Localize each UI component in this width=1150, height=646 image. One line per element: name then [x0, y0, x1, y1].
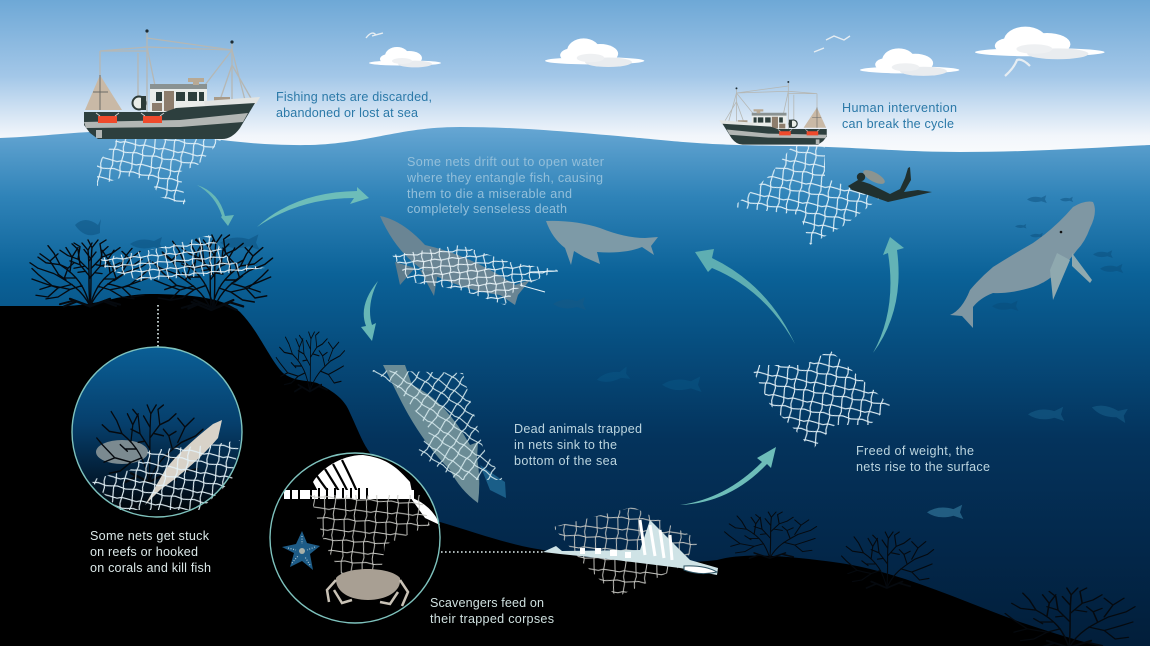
inset circle: reef: [72, 347, 242, 517]
caption: discarded: Fishing nets are discarded,: [276, 90, 432, 104]
rising net: [750, 350, 890, 450]
caption: dead animals sink: [514, 422, 642, 468]
caption: dead animals sink: in nets sink to the: [514, 438, 617, 452]
background fish silhouettes: [75, 195, 1129, 519]
diver: [848, 167, 932, 202]
small boat: retrieving nets: [719, 81, 827, 145]
caption: reefs: [90, 529, 211, 575]
corals: [30, 235, 1135, 646]
dotted connector: seabed: [441, 551, 545, 553]
caption: dead animals sink: bottom of the sea: [514, 454, 617, 468]
caption: discarded: [276, 90, 432, 120]
caption: nets rise: [856, 444, 990, 474]
arrow: whale to sinking: [361, 281, 378, 341]
caption: human intervention: [842, 101, 957, 131]
caption: human intervention: Human intervention: [842, 101, 957, 115]
caption: reefs: Some nets get stuck: [90, 529, 210, 543]
sinking dead animal in net: [370, 365, 506, 503]
caption: scavengers: their trapped corpses: [430, 612, 554, 626]
arrow: boat to reef: [197, 185, 234, 226]
caption: scavengers: Scavengers feed on: [430, 596, 544, 610]
cloud left: [369, 47, 441, 67]
arrow: net up to diver: [873, 237, 904, 353]
caption: nets rise: Freed of weight, the: [856, 444, 974, 458]
arrow: net to whales: [695, 249, 795, 344]
fishing boat: discarding nets: [84, 29, 260, 139]
caption: discarded: abandoned or lost at sea: [276, 106, 418, 120]
caption: scavengers: [430, 596, 554, 626]
caption: open water: [406, 155, 604, 216]
skeleton in net on seabed: [543, 507, 718, 597]
net under boat: [97, 139, 222, 205]
sky background: [0, 0, 1150, 170]
net retrieved by boat: [733, 146, 880, 245]
caption: open water: them to die a miserable and: [407, 187, 572, 201]
caption: open water: completely senseless death: [407, 202, 567, 216]
large whale: [950, 202, 1095, 328]
caption: nets rise: nets rise to the surface: [856, 460, 990, 474]
cloud middle: [545, 38, 644, 67]
caption: open water: where they entangle fish, causing: [406, 171, 603, 185]
cloud far right: [975, 27, 1105, 59]
cloud right: [860, 48, 959, 76]
seagulls: [366, 33, 1030, 76]
entangled whale: [380, 216, 558, 305]
inset circle: scavengers: [270, 453, 440, 623]
arrow: to open water: [257, 187, 369, 227]
caption: open water: Some nets drift out to open water: [407, 155, 604, 169]
caption: dead animals sink: Dead animals trapped: [514, 422, 642, 436]
caption: human intervention: can break the cycle: [842, 117, 954, 131]
caption: reefs: on reefs or hooked: [90, 545, 198, 559]
net caught on reef: [100, 235, 265, 281]
seabed: [0, 294, 1100, 646]
whale in open water: [546, 221, 658, 265]
arrow: seabed to rising net: [680, 447, 776, 505]
caption: reefs: on corals and kill fish: [90, 561, 211, 575]
dotted connector: reef: [157, 305, 159, 347]
